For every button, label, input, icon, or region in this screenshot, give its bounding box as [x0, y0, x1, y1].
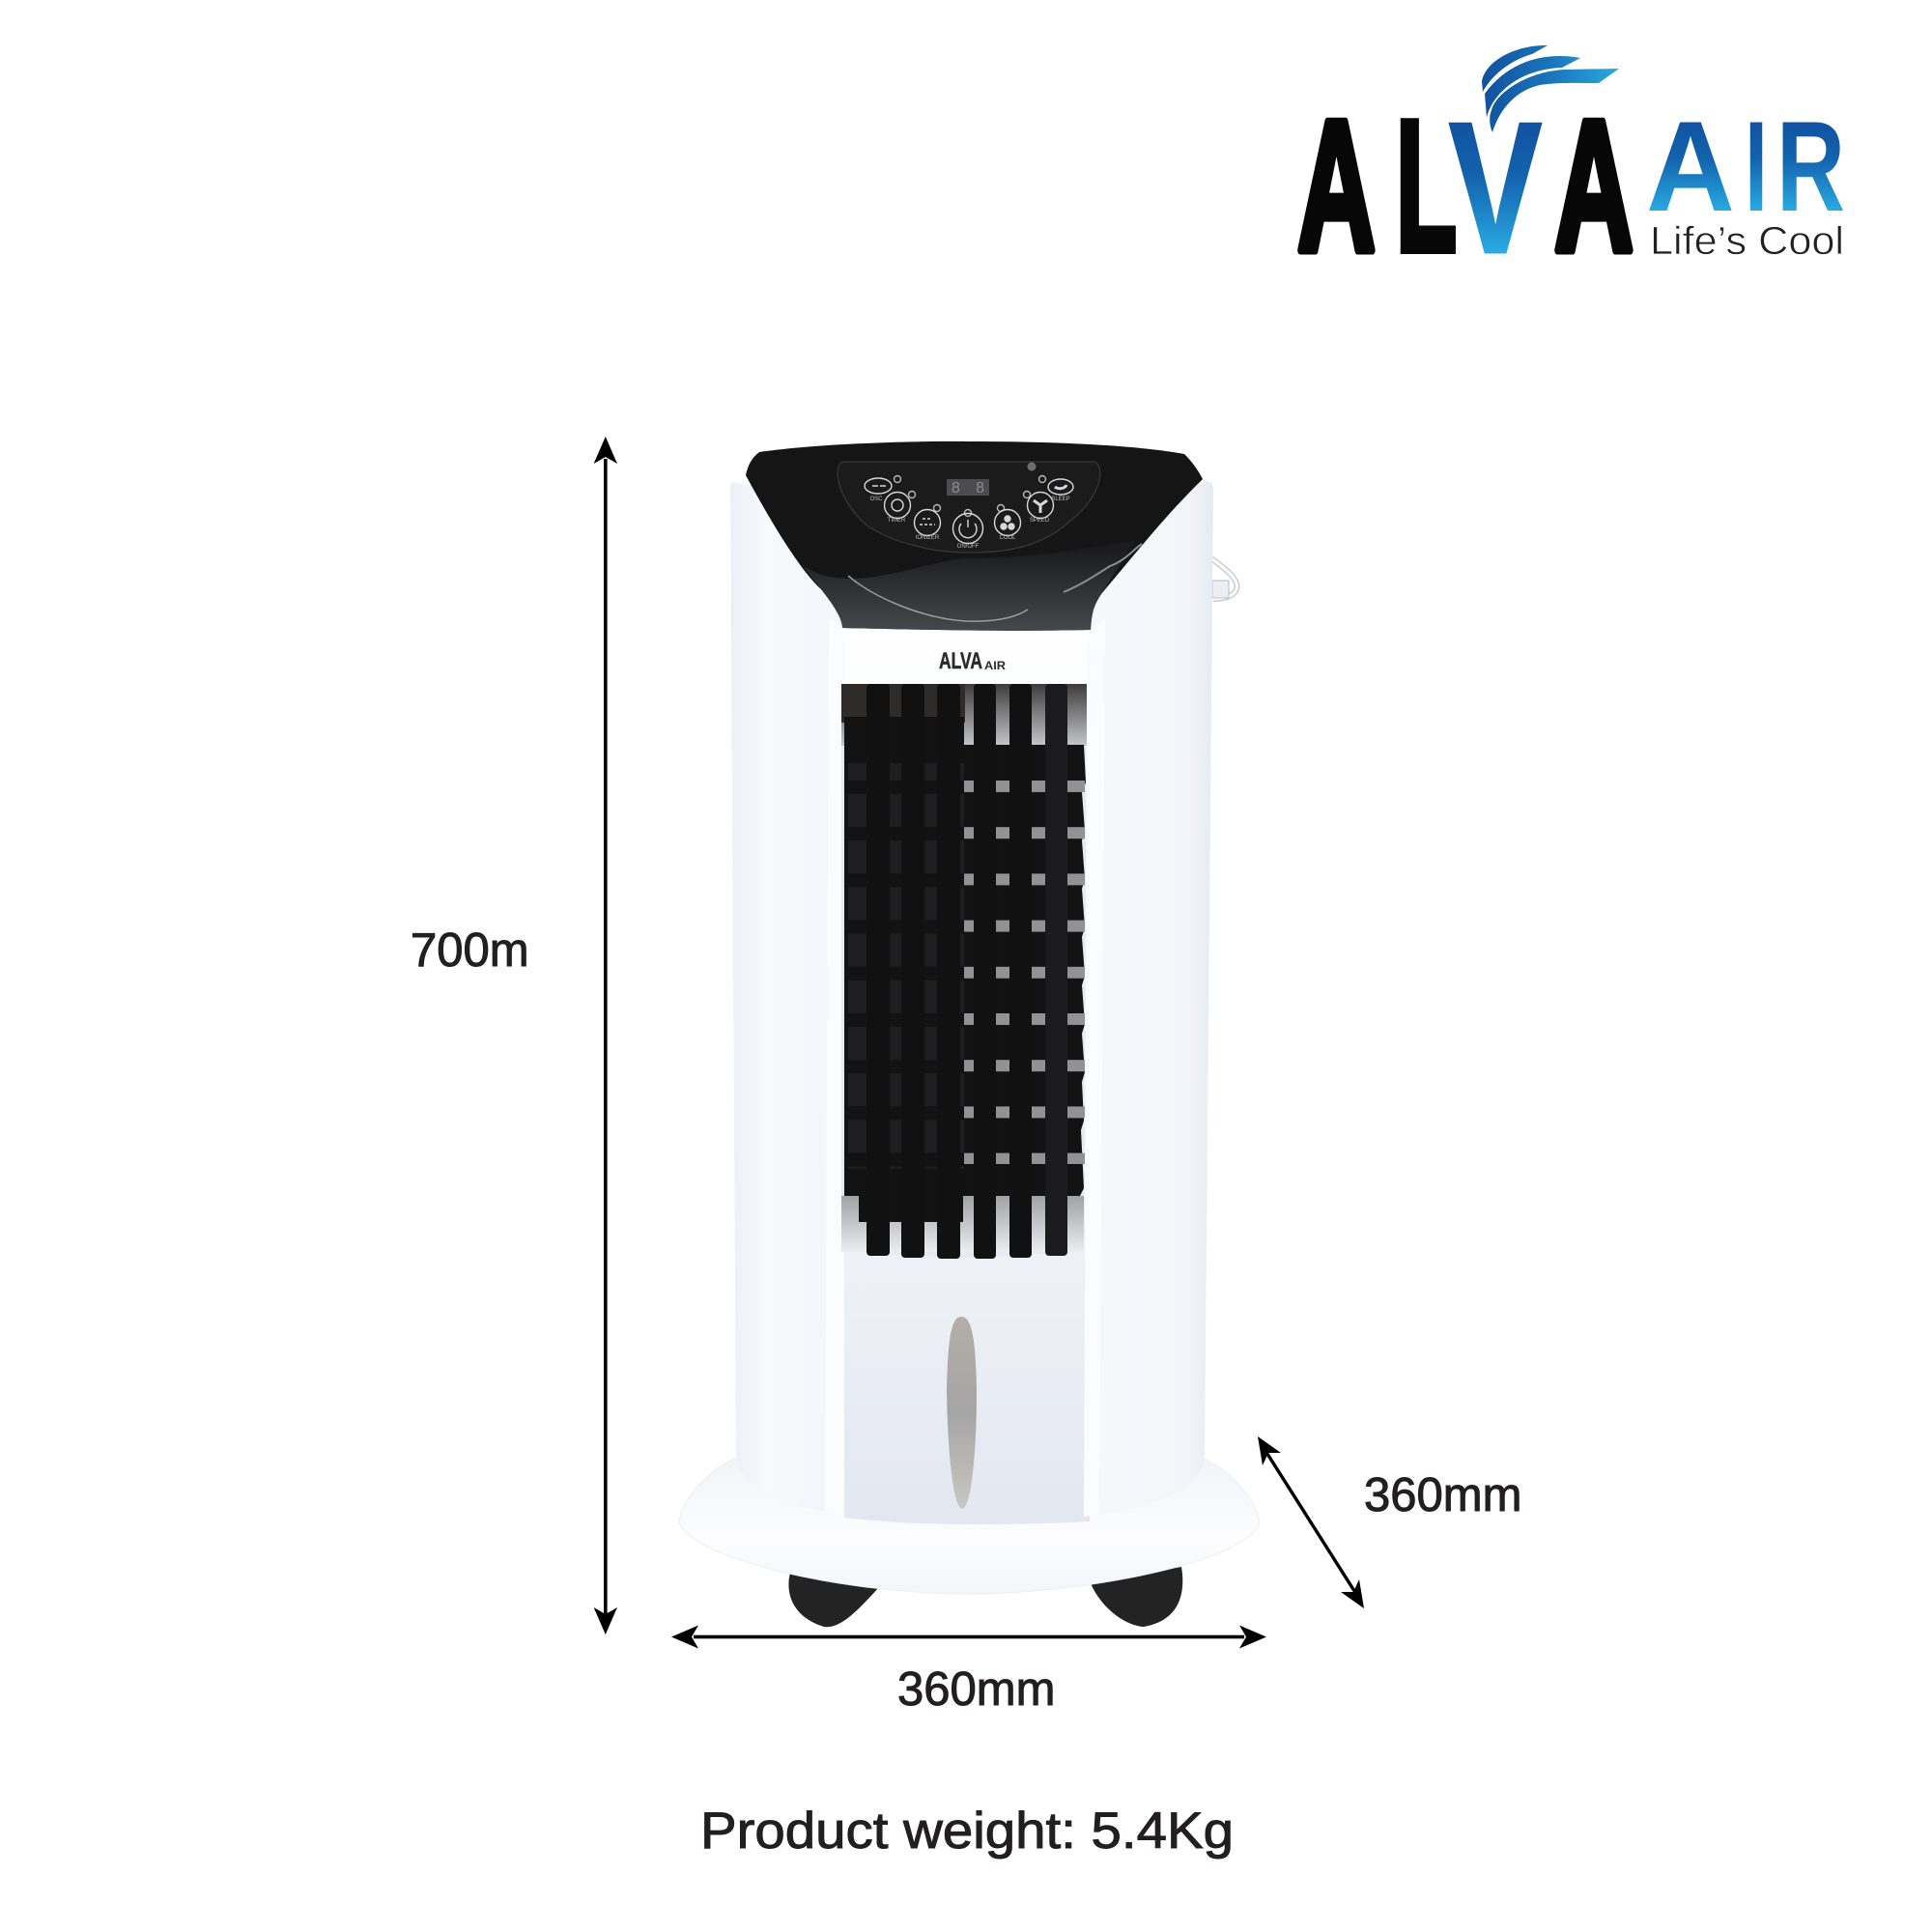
louvre block: [844, 717, 1086, 1222]
power cord: [1211, 558, 1236, 599]
control panel: [838, 462, 1100, 553]
button labels: SLEEP: [1051, 497, 1070, 502]
logo tagline: Life’s Cool: [1650, 218, 1844, 263]
button labels: SPEED: [1030, 518, 1050, 524]
logo wordmark: AIR: R: [1776, 96, 1845, 239]
logo wordmark: AIR: A: [1646, 96, 1735, 239]
logo wordmark: ALVA: L: [1396, 81, 1457, 290]
button labels: COOL: [999, 535, 1016, 541]
product: air cooler: [679, 441, 1260, 1627]
black top head: [746, 441, 1203, 631]
centre front panel: [844, 628, 1090, 1524]
button labels: ON/OFF: [957, 544, 980, 550]
label: width: 360mm: [897, 1663, 1055, 1716]
indicator LEDs: [895, 475, 1045, 516]
air outlet grille: [841, 684, 1087, 1259]
control buttons: [865, 478, 1073, 543]
castor wheel right: [1091, 1567, 1182, 1627]
button labels: [869, 497, 1070, 550]
brand label on body: AIR: [984, 659, 1006, 672]
round base: [679, 1459, 1260, 1594]
logo wordmark: AIR: I: [1745, 96, 1768, 239]
indicator dot: [1028, 462, 1036, 471]
logo: blue air swoosh: [1482, 45, 1619, 132]
label: depth: 360mm: [1364, 1469, 1521, 1521]
water tank handle: [947, 1317, 977, 1509]
brand label on body: ALVA: [939, 648, 982, 674]
arrow: depth: [1258, 1436, 1364, 1608]
label: product weight: Product weight: 5.4Kg: [700, 1803, 1234, 1860]
digital display: 88: [952, 480, 984, 497]
arrow: height: [594, 437, 617, 1634]
vertical louvres: [867, 684, 1067, 1259]
cooler body: [730, 481, 1213, 1523]
label: height: 700m: [411, 924, 529, 977]
right side panel highlight: [1084, 618, 1105, 1517]
castor wheel left: [788, 1573, 879, 1627]
button labels: OSC: [869, 497, 883, 502]
logo: Alva Air: [1297, 45, 1845, 292]
logo wordmark: ALVA: V: [1449, 83, 1542, 292]
button labels: TIMER: [888, 518, 906, 524]
logo wordmark: AIR: [1646, 96, 1845, 239]
left side panel highlight: [825, 618, 844, 1517]
arrow: width: [671, 1625, 1266, 1648]
button labels: IONIZER: [916, 535, 940, 541]
logo wordmark: ALVA: A: [1554, 81, 1634, 290]
logo wordmark: ALVA: [1297, 81, 1634, 292]
logo wordmark: ALVA: A: [1297, 81, 1376, 290]
